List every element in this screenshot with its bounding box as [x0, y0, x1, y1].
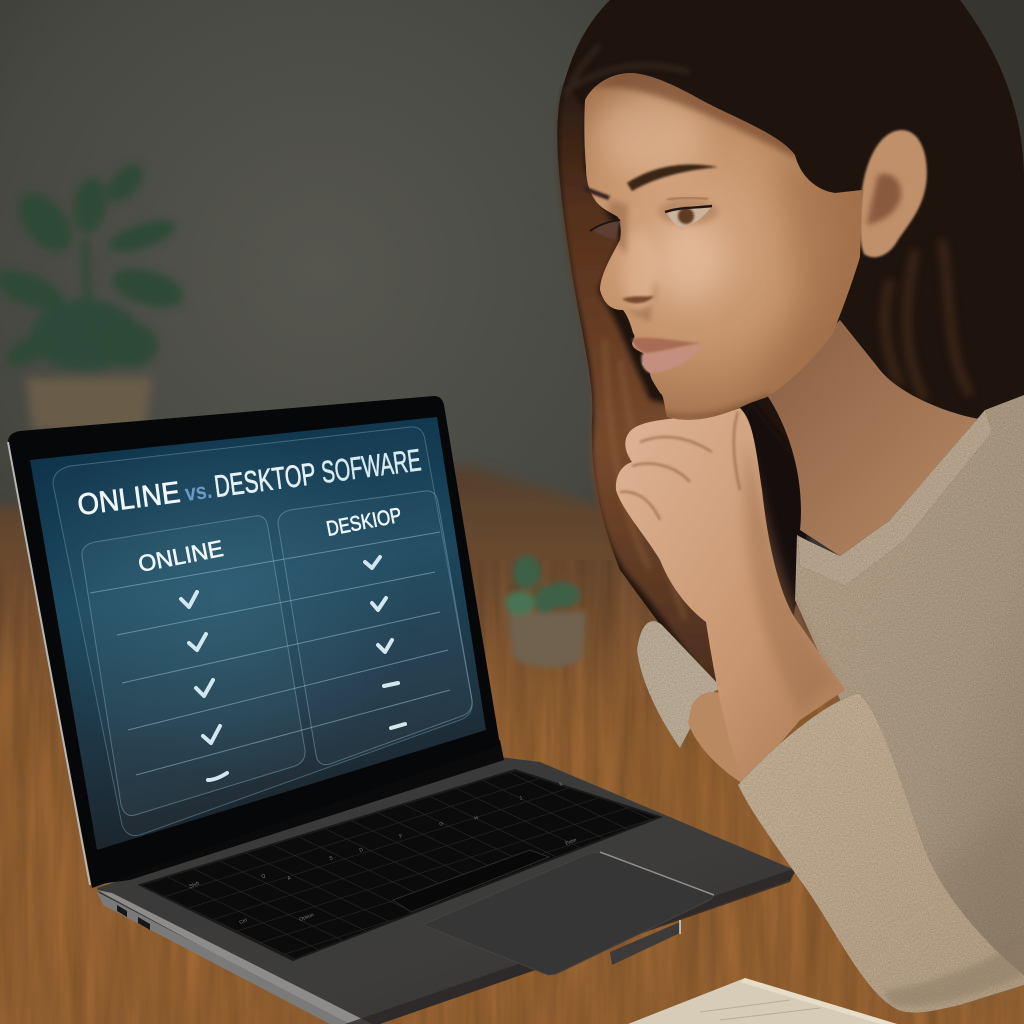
screen [30, 417, 486, 850]
wall background [0, 0, 1024, 560]
screen title: SOFWARE [319, 442, 423, 490]
desktop check marks [365, 557, 405, 728]
key labels: Shift [189, 881, 201, 890]
sweater collar [798, 410, 992, 586]
screen title: DESKTOP [212, 456, 318, 504]
eye near [665, 198, 712, 227]
key labels: G [439, 821, 444, 828]
online check marks [181, 592, 227, 780]
key labels: Enter [565, 837, 578, 847]
blurred potted plant [0, 157, 188, 433]
desktop heading: DESKIOP [325, 504, 404, 541]
laptop [8, 396, 795, 1024]
keyboard [140, 770, 660, 960]
eyebrow far [584, 186, 610, 200]
laptop lid [8, 396, 500, 888]
eye far [590, 220, 620, 240]
lips [632, 338, 701, 373]
desktop column [278, 491, 472, 765]
screen title [75, 442, 423, 522]
key labels: K [559, 781, 564, 788]
sweater body [795, 395, 1024, 1012]
far arm and sleeve [637, 621, 755, 785]
key labels: Q [261, 873, 266, 880]
screen title: ONLINE [76, 476, 182, 522]
outer screen card [53, 427, 472, 836]
key labels: A [287, 875, 292, 882]
eye socket shadow [658, 199, 718, 225]
chin shadow [660, 392, 770, 420]
silver front edge [97, 890, 372, 1024]
ports [117, 905, 150, 930]
key labels: S [329, 855, 334, 862]
key labels: F [399, 833, 404, 840]
plant pot [26, 378, 152, 433]
hand and forearm [616, 408, 845, 785]
nostril [622, 296, 654, 303]
screen title: vs. [183, 477, 214, 506]
small plant pot [508, 612, 586, 667]
woman [557, 0, 1024, 1013]
nose shadow [629, 284, 658, 322]
small plant on table [505, 555, 586, 667]
key labels: D [359, 847, 364, 854]
small plant leaves [505, 555, 580, 615]
key labels: Option [299, 912, 315, 923]
side edge right [345, 870, 795, 1024]
laptop base [97, 757, 795, 1024]
notebook on table [628, 978, 897, 1024]
key labels: J [519, 795, 524, 802]
neck [767, 320, 985, 556]
front sleeve [738, 693, 1024, 1013]
ear [860, 130, 927, 257]
plant leaves [0, 157, 188, 372]
wooden table [0, 465, 1024, 1024]
key labels [189, 781, 578, 926]
trackpad [423, 852, 714, 975]
hair highlights [885, 240, 970, 400]
face shading [595, 93, 705, 177]
online column [82, 516, 305, 816]
online heading: ONLINE [136, 535, 225, 577]
space bar [393, 850, 549, 912]
eyebrow near [627, 164, 718, 191]
key labels: H [474, 815, 479, 822]
key labels: Ctrl [239, 918, 248, 926]
face [584, 60, 870, 420]
front notch [610, 922, 680, 965]
hair [557, 0, 1024, 690]
fingers [620, 412, 740, 520]
hinge shadow [92, 740, 504, 885]
